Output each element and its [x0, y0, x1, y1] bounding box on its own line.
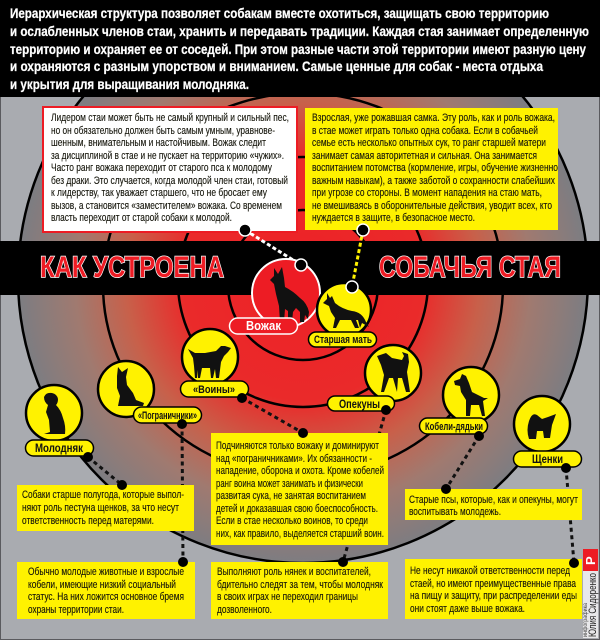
icon: warriors dog: [182, 329, 238, 385]
panel: border guards text: кобели, имеющие низкий социальный: [28, 579, 176, 591]
panel: border guards text: [17, 562, 195, 619]
panel: border guards text: охраны территории стаи.: [28, 604, 124, 616]
title band: [0, 241, 600, 295]
label: senior mother: Старшая мать: [314, 334, 372, 346]
icon: senior mother dog: [317, 283, 371, 337]
label: puppies: Щенки: [532, 452, 563, 466]
panel: guardians text: бдительно следят за тем, чтобы молодняк: [217, 579, 383, 591]
credit: Юлия Сидоренко: [587, 573, 599, 637]
icon: young dog: [26, 385, 82, 441]
panel: uncles text: воспитывать молодежь.: [409, 506, 501, 518]
credit: Р: [583, 556, 598, 565]
panel: senior mother text: нуждается в защите, в безопасное место.: [312, 212, 475, 224]
icon: leader dog: [252, 259, 320, 327]
icon: uncles dog: [443, 367, 499, 423]
label: uncles: Кобели-дядьки: [425, 421, 483, 433]
label: warriors: [180, 381, 248, 397]
panel: leader text: шенным, внимательным и настойчивым. Вожак следит: [51, 137, 266, 149]
label: young: Молодняк: [35, 441, 84, 455]
panel: guardians text: дозволенного.: [217, 604, 272, 616]
panel: leader text: вызов, а становится «заместителем» вожака. Со временем: [51, 200, 282, 212]
connectors: [88, 230, 574, 563]
panel: senior mother text: [305, 108, 558, 230]
panel: warriors text: Подчиняются только вожаку и доминируют: [216, 440, 379, 452]
title left: КАК УСТРОЕНА: [40, 251, 224, 284]
header panel: [0, 0, 600, 97]
label: border guards: [134, 407, 202, 423]
intro text: и укрытия для выращивания молодняка.: [10, 76, 249, 92]
panel: uncles text: [405, 489, 582, 520]
icon: puppy: [514, 396, 570, 452]
credit: инфографика: [583, 602, 589, 637]
panel: warriors text: над «пограничниками». Их обязанности -: [216, 453, 372, 465]
panel: senior mother text: в стае может играть только одна собака. Если в собачьей: [312, 125, 538, 137]
connector dots: [83, 224, 579, 568]
panel: leader text: власть переходит от старой собаки к молодой.: [51, 212, 232, 224]
label: senior mother: [308, 332, 376, 347]
panel: young text: Собаки старше полугода, которые выпол-: [22, 489, 184, 501]
panel: warriors text: нападение, оборона и охота. Кроме кобелей: [216, 465, 384, 477]
panel: young text: ответственность перед матерями.: [22, 515, 154, 527]
panel: leader text: Часто ранг вожака переходит от старого пса к молодому: [51, 162, 272, 174]
icon: border guards dog: [98, 361, 154, 417]
panel: young text: [17, 485, 194, 531]
panel: border guards text: Обычно молодые животные и взрослые: [28, 566, 184, 578]
label: warriors: «Воины»: [193, 384, 235, 396]
panel: warriors text: детей и доказавшая свою боеспособность.: [216, 503, 378, 515]
panel: leader text: Лидером стаи может быть не самый крупный и сильный пес,: [51, 112, 289, 124]
panel: young text: няют роль пестуна щенков, за что несут: [22, 502, 179, 514]
label: leader: [230, 318, 298, 334]
panel: guardians text: [211, 562, 388, 619]
panel: guardians text: в своих играх не переходил границы: [217, 591, 358, 603]
panel: leader text: к лидерству, так уважает старшего, что не бросает ему: [51, 187, 267, 199]
panel: warriors text: ранг воина может занимать и физически: [216, 478, 363, 490]
panel: warriors text: развитая сука, не занятая воспитанием: [216, 490, 366, 502]
panel: warriors text: [211, 433, 388, 545]
panel: guardians text: Выполняют роль нянек и воспитателей,: [217, 566, 371, 578]
panel: leader text: [43, 107, 297, 232]
panel: leader text: без драки. Это случается, когда молодой член стаи, готовый: [51, 175, 288, 187]
icon: guardians dog: [365, 345, 421, 401]
label: border guards: «Пограничники»: [138, 410, 197, 422]
label: leader: Вожак: [246, 318, 281, 333]
panel: warriors text: них, как правило, выделяется старший воин.: [216, 528, 384, 540]
panel: border guards text: статус. На них ложится основное бремя: [28, 591, 184, 603]
label: uncles: [420, 418, 488, 434]
label: guardians: Опекуны: [339, 397, 380, 411]
panel: warriors text: Если в стае несколько воинов, то среди: [216, 515, 368, 527]
panel: leader text: за дисциплиной в стае и не пускает на территорию «чужих».: [51, 150, 284, 162]
panel: puppies text: они стоят даже выше вожака.: [410, 603, 525, 615]
intro text: [10, 5, 589, 92]
panel: puppies text: [405, 559, 582, 619]
panel: leader text: но он обязательно должен быть самым умным, уравнове-: [51, 125, 275, 137]
label: puppies: [514, 451, 582, 467]
